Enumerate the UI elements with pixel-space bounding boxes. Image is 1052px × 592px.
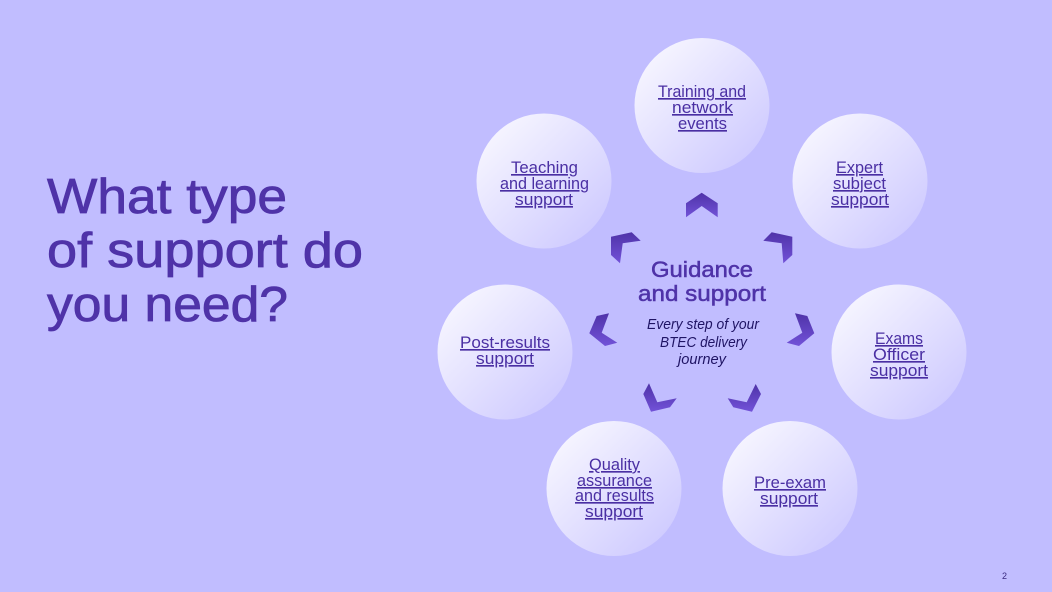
circle: Teaching and learning support: support — [515, 191, 573, 209]
circle: Exams Officer support: Officer — [873, 346, 926, 364]
circle: Post-results support — [438, 284, 572, 420]
arrow: left — [589, 313, 617, 346]
circle: Expert subject support: Expert — [836, 159, 883, 177]
circle: Pre-exam support: Pre-exam — [754, 474, 826, 492]
circle: Quality assurance and results support: assurance — [577, 472, 652, 490]
title — [47, 170, 363, 332]
circle: Exams Officer support: support — [870, 362, 928, 380]
arrow: top — [686, 193, 718, 217]
center heading: and support — [638, 281, 766, 306]
circle: Expert subject support: subject — [833, 175, 886, 193]
circle: Quality assurance and results support: support — [585, 503, 643, 521]
circle: Expert subject support: support — [831, 191, 889, 209]
circle: Post-results support: support — [476, 350, 534, 368]
title: you need? — [47, 278, 288, 332]
center subtitle: Every step of your — [647, 317, 760, 333]
circle: Teaching and learning support: Teaching — [511, 159, 578, 177]
circle: Exams Officer support: Exams — [875, 330, 923, 348]
arrow: right — [787, 313, 814, 346]
circle: Pre-exam support: support — [760, 490, 818, 508]
circle: Teaching and learning support — [476, 114, 612, 248]
circle: Training and network events: network — [672, 99, 734, 117]
title: of support do — [47, 224, 363, 278]
circle: Post-results support: Post-results — [460, 334, 550, 352]
circle: Exams Officer support — [832, 284, 966, 420]
center subtitle: journey — [676, 352, 727, 368]
center heading — [638, 257, 766, 306]
arrow: lower right — [728, 384, 761, 412]
title: What type — [47, 170, 287, 224]
circle: Expert subject support — [792, 114, 928, 248]
circle: Teaching and learning support: and learning — [500, 175, 589, 193]
circle: Training and network events: events — [678, 115, 727, 133]
arrow: upper left — [611, 232, 641, 263]
center heading: Guidance — [651, 257, 753, 282]
page number: 2 — [1002, 571, 1007, 581]
circle: Training and network events — [634, 38, 770, 173]
circle: Quality assurance and results support: and results — [575, 487, 654, 505]
center subtitle — [647, 317, 760, 368]
arrow: upper right — [763, 232, 792, 263]
circle: Pre-exam support — [722, 421, 858, 556]
arrow: lower left — [643, 383, 677, 412]
circle: Training and network events: Training and — [658, 83, 746, 101]
circle: Quality assurance and results support: Quality — [589, 456, 641, 474]
center subtitle: BTEC delivery — [660, 335, 748, 351]
circle: Quality assurance and results support — [546, 421, 682, 556]
